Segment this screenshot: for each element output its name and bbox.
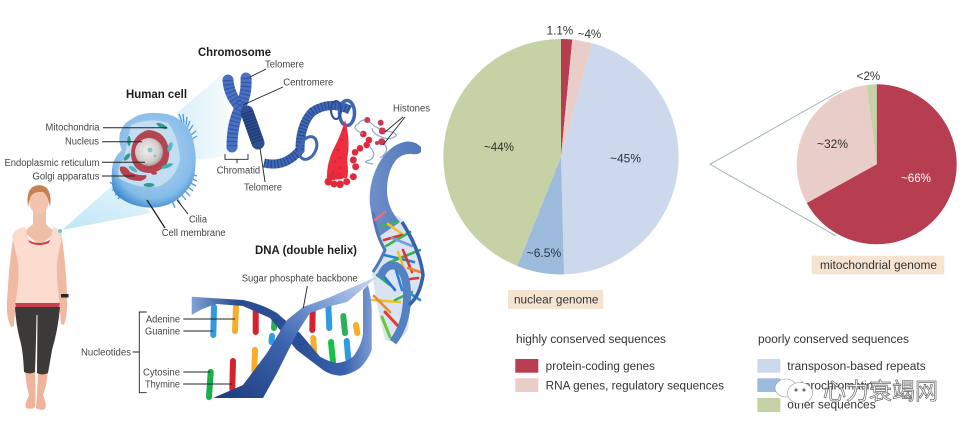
- swatch: heterochromatin: [757, 378, 780, 392]
- label: Endoplasmic reticulum: Endoplasmic reticulum: [4, 158, 100, 169]
- slice: other sequences: [443, 39, 561, 266]
- watch: [61, 294, 68, 298]
- rear strand: [402, 222, 423, 305]
- heading: DNA (double helix): DNA (double helix): [255, 243, 357, 257]
- heading: Chromosome: Chromosome: [198, 45, 271, 59]
- label: protein-coding genes: protein-coding genes: [546, 361, 655, 373]
- legend: poorly conserved sequences: [757, 334, 926, 412]
- calves and feet: [25, 370, 48, 410]
- legend heading: poorly conserved sequences: [758, 334, 909, 346]
- label: Telomere lower: Telomere: [244, 182, 282, 194]
- value: ~6.5%: ~6.5%: [527, 248, 561, 260]
- label: transposon-based repeats: transposon-based repeats: [787, 361, 926, 373]
- value: ~66%: ~66%: [901, 173, 931, 185]
- heading: Human cell: Human cell: [126, 87, 187, 101]
- nucleosome beads: [324, 120, 372, 188]
- pie chart: mitochondrial genome: [797, 71, 957, 244]
- label: RNA genes: RNA genes, regulatory sequences: [546, 380, 724, 392]
- cell leader lines: [102, 128, 188, 228]
- value: ~44%: ~44%: [484, 142, 514, 154]
- callout lines to mitochondrial pie: [710, 90, 842, 236]
- watermark text: 心力衰竭网: [823, 378, 938, 404]
- DNA leader lines: [133, 286, 307, 393]
- hair: [27, 185, 51, 207]
- label: Telomere upper: Telomere: [265, 60, 304, 70]
- swatch: RNA genes: [515, 378, 538, 392]
- illustration: chromosome: [228, 78, 258, 147]
- illustration: lower DNA helix: [192, 276, 378, 398]
- slice: other sequences: [867, 84, 877, 164]
- caption: nuclear genome: [508, 290, 603, 309]
- slice: RNA genes: [561, 40, 592, 157]
- value: ~32%: ~32%: [817, 139, 848, 151]
- label: Chromatid: Chromatid: [217, 166, 260, 176]
- value: ~45%: ~45%: [610, 154, 641, 166]
- illustration: human cell: [110, 113, 197, 208]
- arms: [7, 232, 67, 327]
- cilia: [110, 114, 197, 208]
- figure: woman: [7, 185, 69, 410]
- label: Adenine: Adenine: [146, 314, 180, 326]
- front ribbon loop: [380, 266, 407, 342]
- uncoiling chromatid: [247, 112, 258, 143]
- cell body: [112, 113, 196, 208]
- DNA thread and histones: [355, 117, 396, 164]
- slice: heterochromatin: [517, 157, 564, 274]
- slice: protein-coding genes: [807, 84, 957, 244]
- illustration: upper DNA helix: [370, 142, 423, 342]
- label: Nucleotides: Nucleotides: [81, 348, 131, 358]
- label: heterochromatin: heterochromatin: [787, 380, 873, 392]
- helix body: [371, 205, 423, 341]
- helix hook: [370, 142, 421, 236]
- swatch: transposon-based repeats: [757, 359, 780, 373]
- label: Mitochondria: Mitochondria: [46, 122, 100, 134]
- head and neck: [24, 210, 56, 246]
- value: 1.1%: 1.1%: [547, 26, 573, 38]
- label: Guanine: Guanine: [145, 326, 180, 338]
- caption: nuclear genome: nuclear genome: [514, 294, 598, 306]
- icon: chat bubbles: [775, 379, 812, 404]
- value: ~4%: ~4%: [578, 29, 601, 41]
- caption: mitochondrial genome: mitochondrial genome: [820, 260, 937, 272]
- pie chart: nuclear genome: [443, 26, 679, 274]
- zoom cone: body to cell: [62, 185, 151, 230]
- slice: transposon-based repeats: [561, 43, 679, 274]
- ribbon A: [192, 285, 372, 376]
- rear base pairs: [209, 304, 357, 397]
- shoulder marker: [58, 229, 62, 233]
- label: Cell membrane: Cell membrane: [162, 228, 226, 239]
- zoom cone: cell to chromosome: [177, 72, 234, 160]
- slice: RNA genes: [797, 85, 877, 203]
- tank top neckline: [28, 240, 50, 245]
- label: Histones: Histones: [393, 104, 430, 114]
- golgi apparatus: [120, 167, 146, 181]
- label: Centromere: Centromere: [283, 78, 334, 88]
- label: Sugar phosphate backbone: Sugar phosphate backbone: [242, 274, 358, 284]
- swatch: other sequences: [757, 398, 780, 412]
- caption: mitochondrial genome: [812, 256, 944, 274]
- legend heading: highly conserved sequences: [516, 334, 666, 346]
- colored base pairs: [372, 212, 420, 337]
- value: <2%: <2%: [857, 71, 880, 83]
- chromatin coil: [264, 100, 354, 164]
- hem: [15, 303, 60, 307]
- chromatid arms: [228, 78, 246, 147]
- label: Cilia: Cilia: [189, 214, 207, 226]
- swatch: protein-coding genes: [515, 359, 538, 373]
- label: Nucleus: Nucleus: [65, 136, 99, 148]
- endoplasmic reticulum: [131, 130, 169, 173]
- cell labels: [4, 122, 100, 182]
- leggings: [15, 307, 60, 374]
- shirt: [12, 227, 62, 304]
- left strand: [373, 212, 385, 272]
- mitochondria: [123, 122, 174, 187]
- slice: protein-coding genes: [561, 39, 572, 157]
- ribbon B: [213, 276, 378, 398]
- label: Thymine: Thymine: [145, 380, 180, 390]
- nucleus: [135, 138, 163, 166]
- label: other sequences: other sequences: [787, 400, 876, 412]
- label: Golgi apparatus: Golgi apparatus: [32, 172, 100, 182]
- cut-away interior: [118, 120, 180, 187]
- watermark: [775, 378, 938, 404]
- label: Cytosine: Cytosine: [143, 368, 180, 378]
- legend: highly conserved sequences: [515, 334, 724, 392]
- chromosome leader lines: [225, 69, 405, 182]
